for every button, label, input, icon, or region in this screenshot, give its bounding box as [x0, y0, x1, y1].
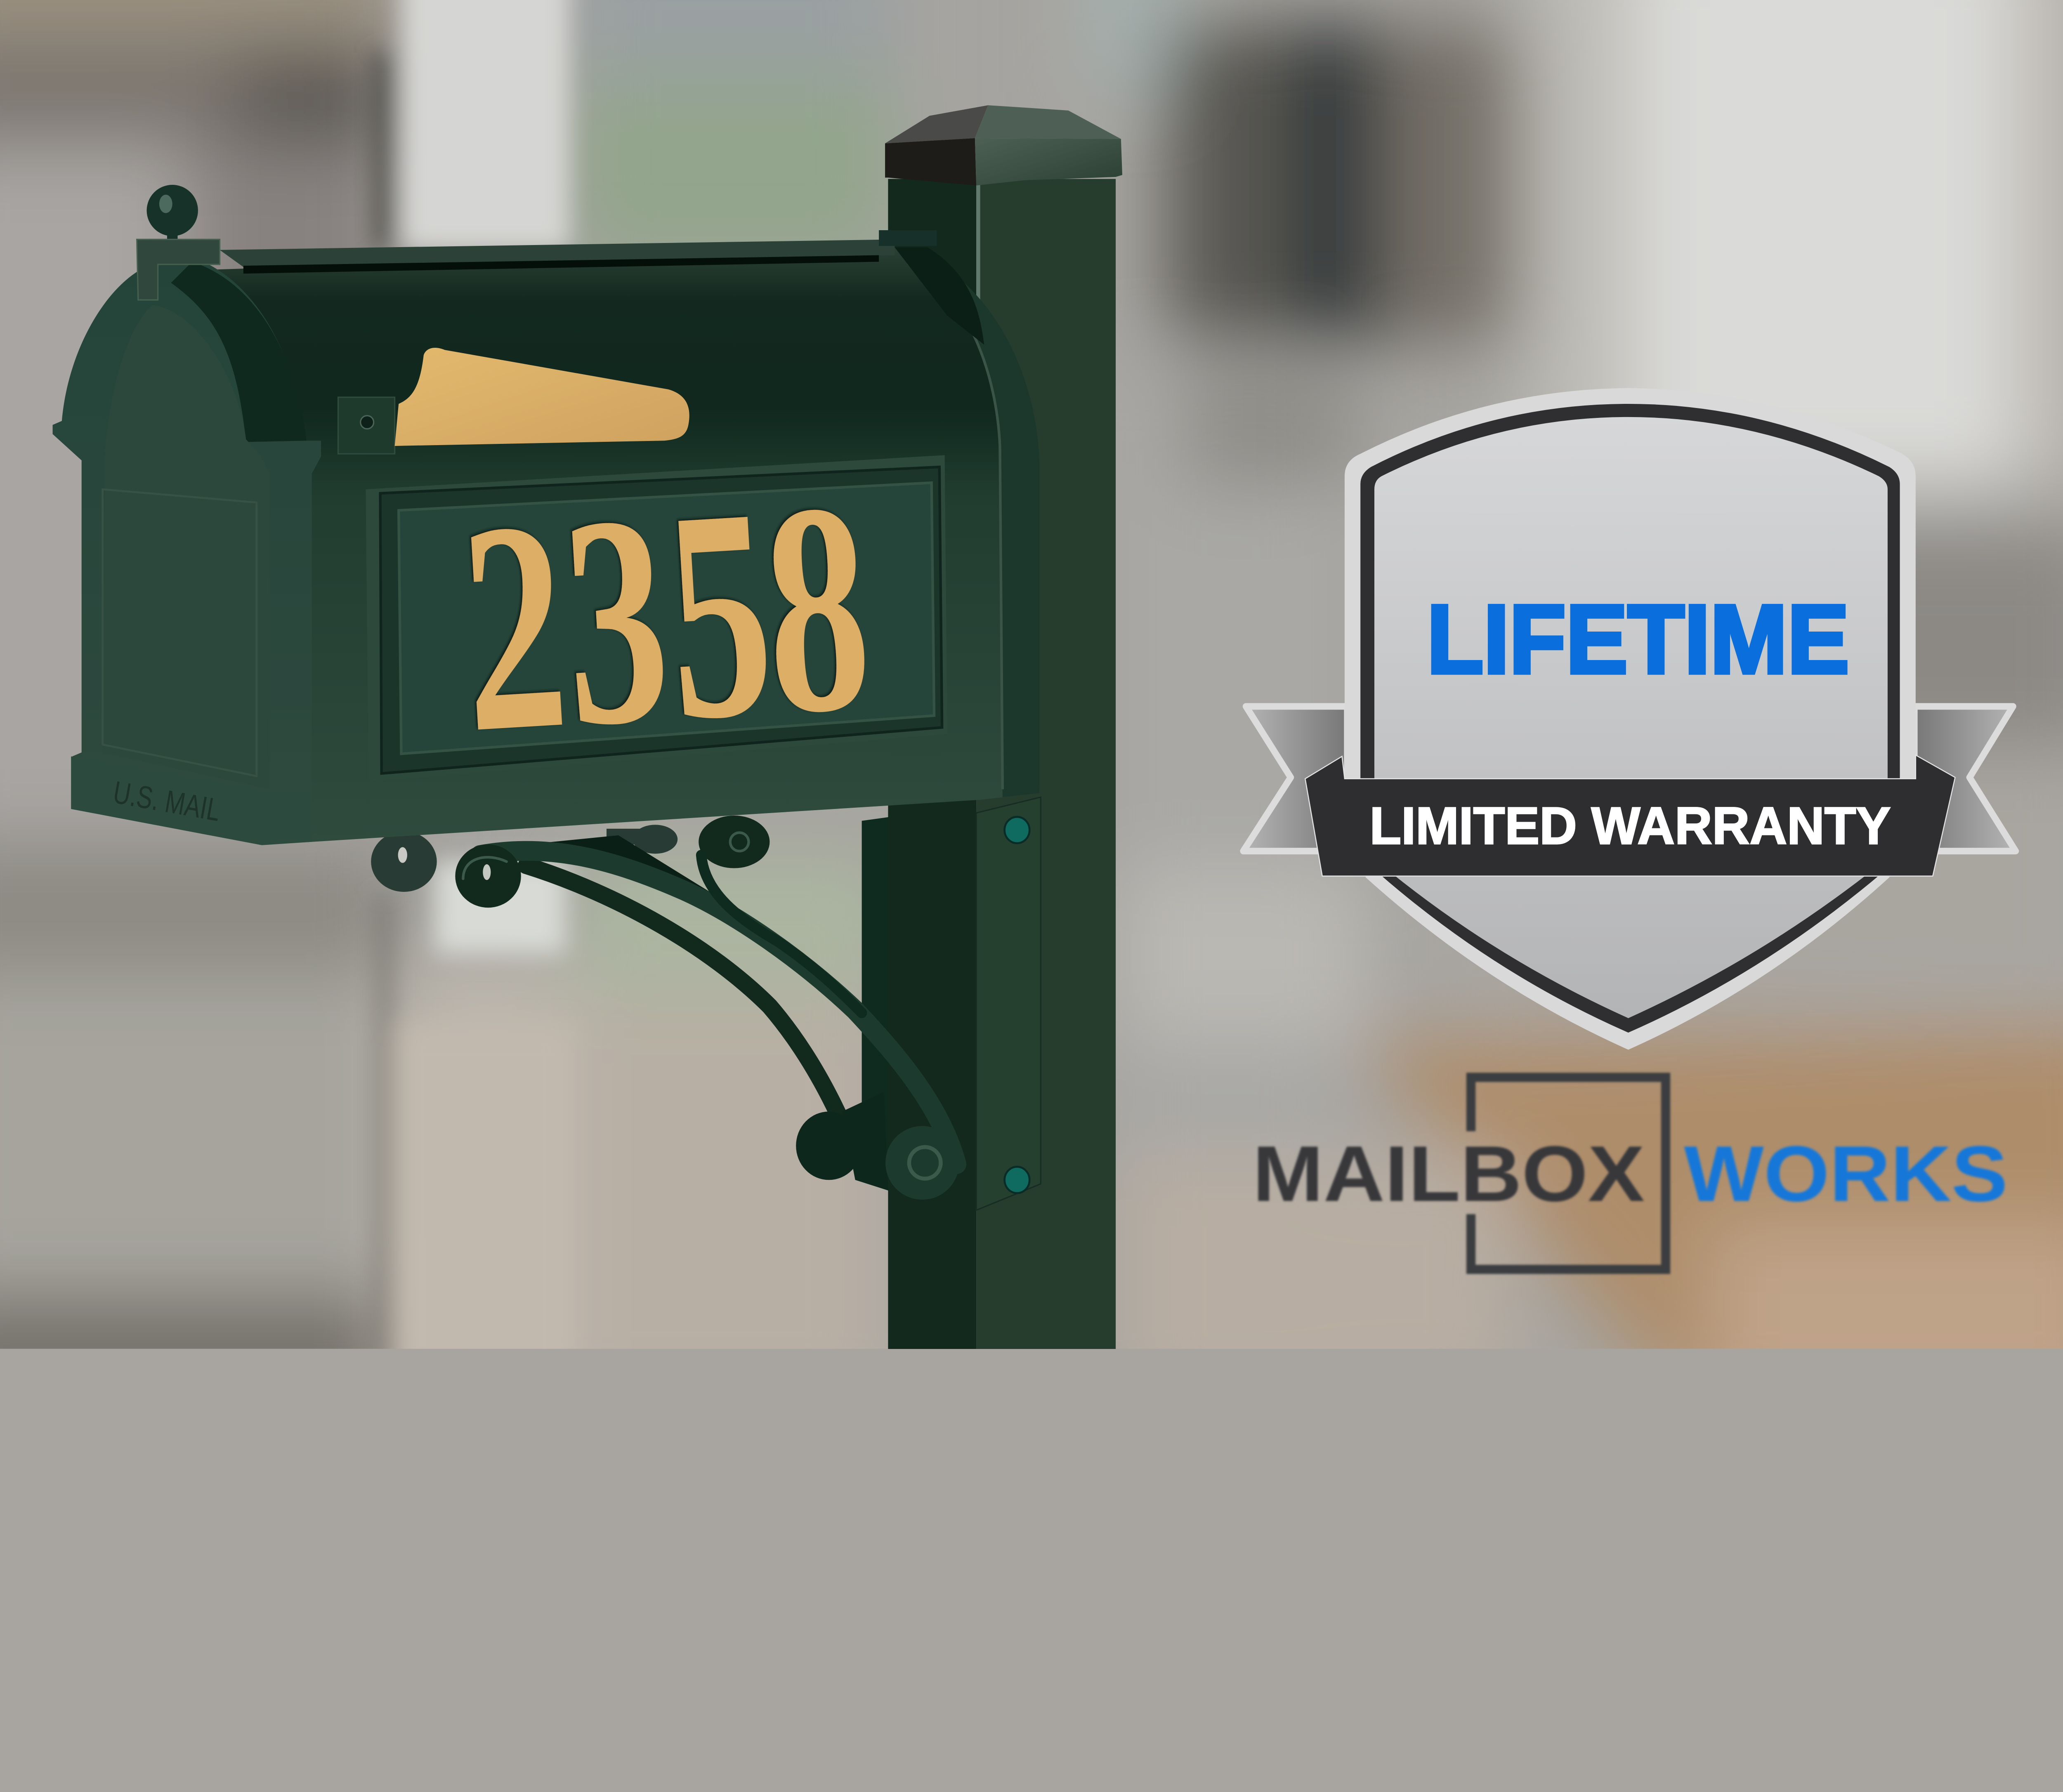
- door arch band: [171, 262, 307, 442]
- warranty badge: [1243, 388, 2016, 1050]
- infographic canvas: [0, 0, 2063, 1349]
- post with cap: [862, 105, 1122, 1363]
- bottom spiral: [885, 1126, 959, 1200]
- finial ball: [147, 185, 198, 242]
- ribbon right tail: [1914, 706, 2016, 851]
- mailbox body: [210, 247, 1039, 842]
- mounting plate: [976, 797, 1041, 1210]
- shield: [1345, 388, 1916, 1050]
- right hinge: [879, 230, 984, 344]
- lower arm: [526, 865, 852, 1147]
- gold flag: [395, 348, 689, 446]
- upper arm: [480, 851, 956, 1164]
- embossed U.S. MAIL: U.S. MAIL: [111, 775, 223, 828]
- heading: limited warranty: LIMITED WARRANTY: [1370, 797, 1891, 856]
- house number: 2358: [454, 440, 878, 795]
- icon: rivet top: [1005, 817, 1029, 843]
- foot disc: [796, 1092, 888, 1191]
- logo square: [1471, 1078, 1666, 1269]
- number plate: [366, 440, 947, 795]
- small curl: [607, 825, 677, 854]
- blurred background room: [0, 0, 2063, 1421]
- heading: lifetime: LIFETIME: [1427, 585, 1849, 694]
- logo word: mailbox: MAILBOX: [1253, 1129, 1645, 1218]
- ribbon left tail: [1243, 706, 1347, 851]
- ribbon band: [1305, 755, 1955, 876]
- dark wedge: [526, 835, 757, 921]
- left scroll: [455, 844, 521, 908]
- scroll disc left: [371, 831, 437, 892]
- door inner panel: [103, 305, 270, 789]
- bottom lip: [71, 757, 312, 845]
- icon: rivet bottom: [1005, 1167, 1029, 1193]
- mailbox door: [53, 259, 321, 844]
- right scroll: [699, 816, 862, 1013]
- mailbox lid rim: [220, 239, 895, 267]
- inner bracket strip behind post: [862, 805, 976, 1191]
- door latch: [137, 239, 220, 300]
- logo word: works: WORKS: [1684, 1129, 2008, 1218]
- ornamental bracket: [371, 816, 959, 1200]
- flag pivot: [338, 397, 395, 454]
- logo: Mailbox Works: [1253, 1078, 2008, 1269]
- mailbox: [53, 185, 1039, 845]
